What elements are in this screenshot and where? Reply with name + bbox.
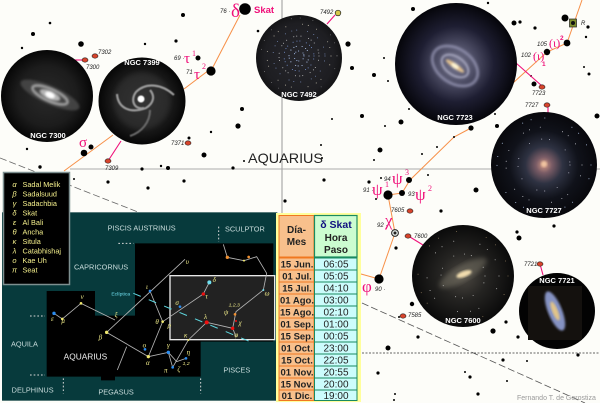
- panel: star legend: Sadachbia: [22, 199, 58, 208]
- galaxy: NGC 7300: NGC 7300: [30, 131, 66, 140]
- star names in pink: 3: [405, 168, 409, 177]
- panel: star legend: Skat: [22, 208, 37, 218]
- table: Skat transit times: 20:00: [323, 380, 349, 390]
- connector lines to galaxies: [73, 15, 548, 275]
- map greek labels: χ: [238, 319, 243, 327]
- galaxy: NGC 7300: [1, 50, 93, 142]
- table header: Hora: [325, 233, 348, 244]
- table: Skat transit times: 23:00: [323, 344, 349, 354]
- table: Skat transit times: 00:05: [323, 332, 349, 342]
- star names in pink: σ: [79, 135, 87, 151]
- catalog numbers: 7723: [532, 91, 546, 97]
- galaxy: NGC 7492: NGC 7492: [281, 90, 317, 99]
- star names in pink: τ: [194, 67, 200, 83]
- map greek labels: μ: [61, 317, 65, 325]
- star names in pink: (ι): [549, 36, 560, 50]
- catalog numbers: 94 ·: [384, 177, 394, 183]
- galaxy: NGC 7721: [519, 273, 595, 349]
- catalog numbers: 7309: [105, 166, 119, 172]
- NGC 7492 marker: [335, 10, 341, 16]
- catalog numbers: 91 ·: [363, 188, 373, 194]
- panel: star legend: α: [12, 180, 17, 189]
- galaxy: NGC 7723: NGC 7723: [437, 113, 473, 122]
- catalog numbers: 76 ·: [220, 9, 230, 15]
- star names in pink: 1: [385, 180, 389, 189]
- map greek labels: θ: [155, 318, 159, 326]
- catalog numbers: 7300: [86, 65, 100, 71]
- map greek labels: ο: [143, 342, 147, 350]
- galaxy: NGC 7727: [491, 112, 597, 218]
- map greek labels: ζ: [177, 366, 181, 374]
- table: Skat transit times: 05:05: [323, 272, 349, 282]
- catalog numbers: R: [581, 21, 586, 27]
- map greek labels: λ: [203, 313, 207, 321]
- catalog numbers: 105 ·: [537, 42, 551, 48]
- panel: star legend: θ: [12, 228, 17, 236]
- star names in pink: ψ: [415, 185, 426, 204]
- star names in pink: δ: [231, 1, 240, 22]
- map region labels: SCULPTOR: [225, 224, 265, 233]
- map greek labels: ξ: [115, 311, 118, 319]
- star names in pink: χ: [384, 211, 393, 230]
- table: Skat transit times: 15 Ago.: [280, 308, 314, 318]
- table: Skat transit times: 06:05: [323, 260, 349, 270]
- map greek labels: κ: [184, 331, 188, 339]
- table: Skat transit times: [276, 213, 361, 402]
- catalog numbers: [86, 9, 586, 319]
- map region labels: PEGASUS: [98, 387, 134, 396]
- table header: [279, 216, 357, 257]
- map greek labels: 1,2: [183, 361, 190, 367]
- panel: star legend: Situla: [22, 237, 42, 246]
- constellation name: AQUARIUS: [248, 150, 323, 166]
- map greek labels: γ: [167, 341, 170, 349]
- map greek labels: [51, 258, 270, 374]
- panel: finder map: [2, 212, 277, 401]
- table header: Paso: [324, 245, 348, 256]
- map greek labels: τ: [205, 292, 208, 300]
- table: Skat transit times: 01 Jul.: [282, 272, 312, 282]
- map region labels: AQUARIUS: [64, 351, 108, 361]
- table: Skat transit times: 01 Nov.: [280, 368, 314, 378]
- table: Skat transit times: 15 Sep.: [280, 332, 314, 342]
- galaxy: NGC 7600: NGC 7600: [445, 316, 481, 325]
- table: Skat transit times: 03:00: [323, 296, 349, 306]
- map greek labels: ψ: [224, 308, 229, 316]
- map region labels: Eclíptica: [111, 291, 130, 297]
- galaxy: NGC 7723: [395, 3, 517, 125]
- table: Skat transit times: 19:00: [323, 391, 349, 402]
- table: Skat transit times: 15 Oct.: [281, 356, 313, 366]
- map stick figure: [54, 244, 267, 370]
- map greek labels: σ: [175, 299, 179, 307]
- galaxy: NGC 7399: [98, 58, 186, 144]
- panel: star legend: Al Bali: [22, 218, 44, 227]
- map ecliptic: [133, 293, 252, 342]
- panel: star legend: λ: [12, 246, 17, 256]
- table header: Día-: [287, 225, 306, 236]
- map greek labels: ε: [51, 315, 54, 323]
- panel: star legend: Seat: [22, 266, 38, 274]
- table rows: [279, 258, 357, 400]
- map greek labels: β: [98, 333, 103, 341]
- catalog numbers: 7492: [320, 10, 334, 16]
- map region labels: PISCIS AUSTRINUS: [108, 224, 176, 233]
- map greek labels: α: [146, 359, 150, 367]
- table: Skat transit times: 01 Dic.: [282, 391, 312, 402]
- galaxy: NGC 7600: [412, 225, 514, 327]
- constellation lines: [64, 0, 582, 279]
- panel: star legend: Ancha: [22, 228, 44, 236]
- catalog numbers: 7727: [525, 103, 539, 109]
- galaxy: NGC 7492: [256, 15, 342, 101]
- table: Skat transit times: 01 Oct.: [281, 344, 313, 354]
- galaxy catalog markers: [82, 54, 550, 318]
- catalog numbers: 102 ·: [521, 53, 535, 59]
- map greek labels: π: [164, 366, 168, 374]
- panel: star legend: κ: [13, 237, 18, 246]
- chi ringed star: [392, 230, 398, 236]
- panel: star legend: [4, 172, 70, 284]
- map borders dotted: [30, 227, 219, 393]
- map greek labels: ρ: [167, 322, 172, 330]
- map greek labels: ι: [146, 283, 148, 291]
- table: Skat transit times: 15 Nov.: [280, 380, 314, 390]
- panel: star legend: δ: [12, 208, 17, 218]
- catalog numbers: 7721: [524, 262, 537, 268]
- table header: Mes: [287, 237, 307, 248]
- map region labels: CAPRICORNUS: [74, 263, 128, 272]
- map greek labels: υ: [186, 258, 189, 266]
- credit: Fernando T. de Gorostiza: [517, 395, 596, 402]
- table: Skat transit times: 15 Jun.: [281, 260, 313, 270]
- galaxy: NGC 7399: NGC 7399: [124, 58, 160, 67]
- map greek labels: δ: [213, 276, 217, 284]
- table: Skat transit times: 15 Jul.: [282, 284, 312, 294]
- map region labels: PISCES: [223, 365, 250, 374]
- table: Skat transit times: 22:05: [323, 356, 349, 366]
- star names in pink: 2: [560, 35, 564, 42]
- table header: δ Skat: [320, 219, 352, 231]
- map greek labels: ω: [265, 290, 270, 298]
- table: Skat transit times: 01 Sep.: [280, 320, 314, 330]
- catalog numbers: 69 ·: [174, 56, 184, 62]
- panel: star legend: π: [12, 266, 18, 274]
- map stars: [52, 256, 264, 369]
- star names in pink: τ: [184, 51, 190, 67]
- table: Skat transit times: 20:55: [323, 368, 349, 378]
- panel: star legend: β: [11, 190, 17, 198]
- map greek labels: φ: [234, 331, 238, 339]
- catalog numbers: 7585: [408, 313, 422, 319]
- table: Skat transit times: 02:10: [323, 308, 349, 318]
- panel: star legend: Catabhishaj: [22, 246, 61, 256]
- table: Skat transit times: 01 Ago.: [280, 296, 314, 306]
- galaxy: NGC 7727: NGC 7727: [526, 206, 562, 215]
- catalog numbers: 7302: [98, 50, 112, 56]
- map greek labels: ν: [81, 293, 85, 301]
- panel: star legend: ο: [12, 256, 17, 265]
- panel: star legend: Sadal Melik: [22, 180, 61, 189]
- table: Skat transit times: 04:10: [323, 284, 349, 294]
- galaxy: NGC 7721: NGC 7721: [539, 276, 575, 285]
- map greek labels: η: [187, 348, 191, 356]
- star names in pink: 1: [542, 61, 546, 68]
- panel: star legend: γ: [13, 199, 18, 208]
- catalog numbers: 93 ·: [408, 192, 418, 198]
- map region labels: DELPHINUS: [12, 386, 54, 395]
- star names in pink: Skat: [254, 5, 275, 16]
- map greek labels: 1,2,3: [229, 303, 240, 309]
- panel: star legend: Kae Uh: [22, 256, 47, 265]
- map region labels: AQUILA: [11, 340, 38, 349]
- catalog numbers: 7371: [171, 141, 184, 147]
- star names in pink: (ι): [533, 49, 544, 63]
- star names in pink: 2: [202, 62, 206, 71]
- star names in pink: φ: [362, 277, 372, 296]
- panel: star legend: Sadalsuud: [22, 190, 57, 198]
- star names in pink: [79, 1, 564, 296]
- table: Skat transit times: 01:00: [323, 320, 349, 330]
- catalog numbers: 71 ·: [186, 70, 196, 76]
- star names in pink: 1: [192, 49, 196, 58]
- catalog numbers: 7600: [414, 234, 428, 240]
- catalog numbers: 90 ·: [375, 287, 385, 293]
- star names in pink: 2: [428, 184, 432, 193]
- star names in pink: ψ: [372, 180, 383, 199]
- catalog numbers: 92 ·: [377, 223, 387, 229]
- panel: star legend: ε: [13, 218, 17, 227]
- catalog numbers: 7605: [391, 208, 405, 214]
- R variable star marker: [570, 19, 576, 27]
- star names in pink: ψ: [392, 169, 403, 188]
- map region labels: [11, 224, 265, 396]
